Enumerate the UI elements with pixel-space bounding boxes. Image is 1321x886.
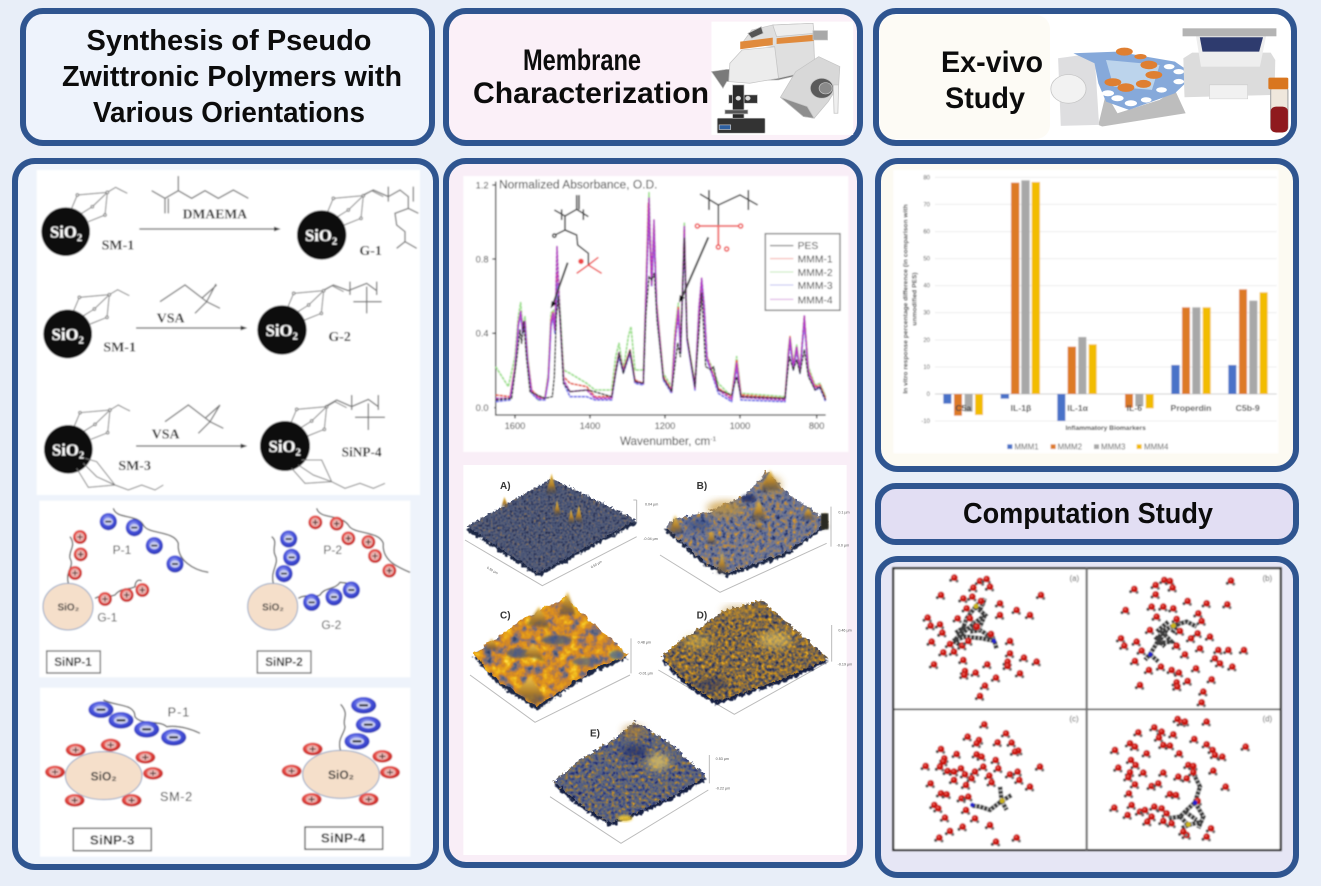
diagram: SiNP-1: P-1 [113, 543, 132, 557]
chemical reaction schemes [37, 170, 420, 495]
legend: MMM-3 [798, 281, 833, 292]
category labels: IL-6 [1127, 403, 1142, 413]
reaction row 1: DMAEMA: G-1 [359, 244, 382, 259]
reaction row 1: DMAEMA: DMAEMA [183, 206, 247, 221]
reaction row 3: VSA: 2 [79, 451, 84, 462]
chart: in-vitro response by inflammatory biomarker: 0 [927, 392, 931, 398]
diagram: SiNP-4 [282, 697, 400, 849]
heading: membrane characterization title [473, 44, 709, 110]
chart: FTIR absorbance spectra: 0.0 [476, 403, 489, 413]
AFM C [470, 592, 653, 722]
chart: in-vitro response by inflammatory biomarker: 20 [923, 338, 931, 344]
reaction row 2: VSA: SM-1 [103, 341, 136, 356]
category labels: Properdin [1171, 403, 1211, 413]
reaction row 3: VSA: SM-3 [118, 459, 151, 474]
chart: in-vitro response by inflammatory biomarker: 50 [923, 257, 931, 263]
heading: synthesis title: Synthesis of Pseudo [86, 25, 372, 57]
panel: computation study heading [878, 486, 1296, 542]
reaction row 3: VSA: SiO [52, 440, 79, 459]
AFM D: 0.46 µm [838, 629, 852, 633]
chart: in-vitro response by inflammatory biomarker: Inflammatory Biomarkers [1066, 425, 1146, 432]
four molecular dynamics frames [893, 568, 1281, 850]
diagram: SiNP-1 [43, 508, 208, 673]
frame b: (b) [1262, 574, 1273, 583]
chart: FTIR absorbance spectra: 1600 [505, 421, 525, 431]
reaction row 2: VSA [43, 282, 382, 358]
reaction row 3: VSA [44, 395, 385, 490]
AFM A: 0.50 µm [590, 560, 603, 569]
heading: synthesis title: Zwittronic Polymers with [62, 61, 402, 93]
reaction row 1: DMAEMA: SM-1 [102, 238, 134, 253]
AFM A [465, 473, 658, 586]
diagram: SiNP-2: P-2 [323, 543, 342, 557]
heading: ex-vivo title: Ex-vivo [941, 46, 1043, 79]
reaction row 3: VSA: 2 [296, 447, 301, 458]
legend: MMM3 [1101, 442, 1126, 451]
diagram: SiNP-3: P-1 [168, 706, 190, 720]
frame b [1116, 574, 1273, 707]
chart: in-vitro response by inflammatory biomarker [893, 170, 1278, 453]
chart: FTIR absorbance spectra: 1200 [655, 421, 675, 431]
diagram: SiNP-1: SiO₂ [58, 603, 79, 614]
AFM D: D) [697, 610, 707, 621]
chart: in-vitro response by inflammatory biomarker: 60 [923, 230, 931, 236]
diagram: SiNP-2: G-2 [321, 618, 342, 632]
AFM A: 0.04 µm [645, 503, 658, 507]
AFM C: C) [500, 610, 511, 621]
panel: polymer synthesis schemes [15, 161, 436, 867]
diagram: SiNP-2 [248, 508, 410, 673]
panel: computation study molecular simulations [878, 559, 1296, 875]
AFM E [550, 722, 730, 843]
AFM D [658, 600, 852, 714]
heading: synthesis title [62, 25, 402, 129]
chart: in-vitro response by inflammatory biomarker: 40 [923, 284, 931, 290]
diagram: SiNP-1: G-1 [97, 611, 118, 625]
legend [1007, 442, 1169, 451]
legend: PES [798, 241, 818, 252]
AFM B: -0.0 µm [837, 544, 849, 548]
reaction row 1: DMAEMA: SiO [50, 223, 77, 242]
chemical structure: negative monomer [695, 190, 758, 251]
diagram: SiNP-3 [45, 700, 200, 851]
reaction row 2: VSA: SiO [52, 325, 79, 344]
chart: FTIR absorbance spectra: 1400 [580, 421, 600, 431]
diagram: SiNP-2: SiO₂ [262, 603, 284, 614]
frame d [1109, 715, 1273, 842]
panel: ex-vivo heading [876, 11, 1294, 143]
diagram: SiNP-2: SiNP-2 [265, 656, 303, 669]
diagram: SiNP-3: SiO₂ [91, 769, 117, 783]
frame a: (a) [1069, 574, 1080, 583]
chart: in-vitro response by inflammatory biomarker: 10 [923, 365, 931, 371]
series MMM1 [943, 365, 1236, 421]
series MMM4 [975, 182, 1268, 415]
legend: MMM-1 [798, 255, 833, 266]
reaction row 2: VSA: 2 [79, 335, 84, 346]
reaction row 1: DMAEMA [41, 176, 418, 260]
legend [765, 234, 840, 310]
chart: in-vitro response by inflammatory biomarker: unmodified PES) [912, 272, 919, 326]
chart: FTIR absorbance spectra: 1.2 [476, 180, 489, 190]
category labels: IL-1β [1011, 403, 1031, 413]
chart: in-vitro response by inflammatory biomarker: 30 [923, 311, 931, 317]
icon: rocker, plate reader and blood tube [1051, 28, 1288, 133]
chart: FTIR absorbance spectra: 1000 [730, 421, 750, 431]
reaction row 3: VSA: SiO [269, 437, 296, 456]
chart: in-vitro response by inflammatory biomarker: 80 [923, 175, 931, 181]
AFM A: 0.50 µm [486, 566, 499, 575]
AFM surface images [463, 465, 852, 855]
diagram: SiNP-3: SM-2 [160, 790, 193, 804]
polymer-particle diagrams SiNP-3 and SiNP-4 [40, 688, 410, 857]
reaction row 2: VSA: G-2 [328, 330, 351, 345]
chart: FTIR absorbance spectra: Normalized Absorbance, O.D. [499, 177, 658, 191]
AFM E: 0.53 µm [716, 757, 729, 761]
AFM B: B) [697, 481, 707, 492]
AFM D: -0.19 µm [838, 663, 852, 667]
legend: MMM-4 [798, 295, 833, 306]
category labels: C5a [955, 403, 971, 413]
category labels [955, 403, 1260, 413]
heading: membrane characterization title: Membrane [523, 44, 641, 77]
chart: FTIR absorbance spectra: 0.8 [476, 254, 489, 264]
reaction row 2: VSA: 2 [293, 331, 298, 342]
panel: ex-vivo bar chart [878, 161, 1296, 469]
chart: in-vitro response by inflammatory biomarker: 70 [923, 202, 931, 208]
polymer-particle diagrams SiNP-1 and SiNP-2 [39, 501, 410, 677]
AFM B [660, 470, 850, 592]
frame d: (d) [1262, 715, 1273, 724]
panel: membrane characterization results [446, 161, 860, 865]
diagram: SiNP-1: SiNP-1 [54, 656, 92, 669]
heading: membrane characterization title: Characterization [473, 77, 709, 110]
arrow: to positive band [553, 263, 568, 303]
legend: MMM4 [1144, 442, 1169, 451]
series MMM3 [965, 180, 1257, 412]
heading: computation study: Computation Study [963, 498, 1213, 530]
chart: FTIR absorbance spectra: 800 [809, 421, 824, 431]
category labels: IL-1α [1067, 403, 1089, 413]
arrow: to negative band [682, 237, 708, 298]
AFM E: -0.22 µm [716, 786, 730, 790]
reaction row 2: VSA: SiO [266, 321, 293, 340]
frame c: (c) [1069, 715, 1079, 724]
AFM E: E) [590, 729, 600, 740]
frame a [922, 574, 1080, 701]
series MMM2 [954, 183, 1247, 416]
heading: ex-vivo title: Study [945, 82, 1025, 115]
reaction row 3: VSA: VSA [152, 427, 180, 442]
AFM B: 0.1 µm [838, 510, 850, 514]
reaction row 1: DMAEMA: SiO [305, 226, 332, 245]
reaction row 2: VSA: VSA [157, 311, 185, 326]
panel: synthesis heading [23, 11, 432, 143]
diagram: SiNP-4: SiO₂ [328, 768, 354, 782]
legend: MMM1 [1014, 442, 1039, 451]
AFM C: -0.01 µm [638, 671, 653, 675]
heading: ex-vivo title [941, 46, 1043, 115]
AFM A: -0.04 µm [643, 537, 658, 541]
AFM C: 0.48 µm [638, 640, 651, 644]
legend: MMM-2 [798, 268, 833, 279]
icon: lab instruments [711, 22, 853, 135]
chart: FTIR absorbance spectra: -1 [710, 436, 716, 443]
heading: synthesis title: Various Orientations [93, 97, 365, 129]
axis titles: In vitro response percentage difference (in comparison with [902, 204, 909, 394]
legend: MMM2 [1058, 442, 1083, 451]
frame c [920, 715, 1079, 847]
diagram: SiNP-4: SiNP-4 [321, 831, 366, 846]
diagram: SiNP-3: SiNP-3 [90, 832, 135, 847]
reaction row 1: DMAEMA: 2 [77, 233, 82, 244]
chart: FTIR absorbance spectra: 0.4 [476, 329, 489, 339]
chart: in-vitro response by inflammatory biomarker: -10 [921, 419, 931, 425]
chemical structure: positive monomer [553, 195, 602, 273]
panel: membrane characterization heading [446, 11, 860, 143]
reaction row 3: VSA: SiNP-4 [342, 445, 382, 460]
reaction row 1: DMAEMA: 2 [332, 236, 337, 247]
category labels: C5b-9 [1236, 403, 1260, 413]
chart: FTIR absorbance spectra: Wavenumber, cm [620, 435, 710, 448]
AFM A: A) [500, 481, 511, 492]
spectra curves [496, 193, 826, 402]
chart: FTIR absorbance spectra [463, 176, 848, 452]
